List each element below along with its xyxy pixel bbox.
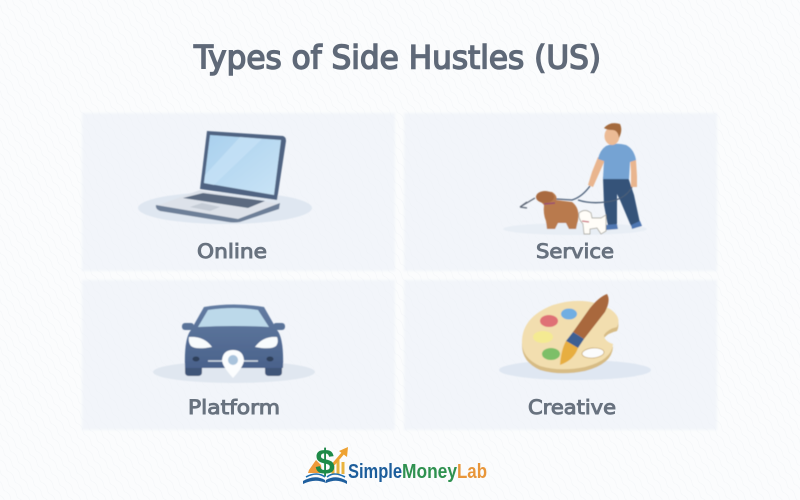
icon: paint palette and brush <box>499 294 651 380</box>
label: platform: Platform <box>188 396 280 419</box>
panel: creative <box>404 280 717 430</box>
logo: SimpleMoneyLab <box>303 443 487 484</box>
white dog <box>579 210 606 234</box>
icon: dollar sign, book and arrow: $ <box>315 443 335 482</box>
wordmark: Money <box>402 460 457 483</box>
panel: platform <box>82 280 395 430</box>
panel: online <box>82 113 395 271</box>
wordmark: Lab <box>457 460 487 483</box>
icon: man walking dogs <box>503 123 647 235</box>
man's arms <box>588 157 637 187</box>
man's torso <box>598 144 636 179</box>
wordmark <box>348 460 487 483</box>
icon: car with location pin <box>153 304 315 383</box>
man's legs <box>603 177 640 226</box>
brown dog <box>540 192 578 229</box>
icon: laptop <box>138 131 312 224</box>
wordmark: Simple <box>348 460 402 483</box>
icon: dollar sign, book and arrow <box>303 443 348 484</box>
paintbrush <box>573 294 609 339</box>
label: online: Online <box>197 240 267 263</box>
label: creative: Creative <box>528 396 616 419</box>
panel: service <box>404 113 717 271</box>
title: Types of Side Hustles (US) <box>193 38 601 76</box>
label: service: Service <box>536 240 614 263</box>
man's head <box>604 127 620 145</box>
leashes <box>556 186 632 203</box>
